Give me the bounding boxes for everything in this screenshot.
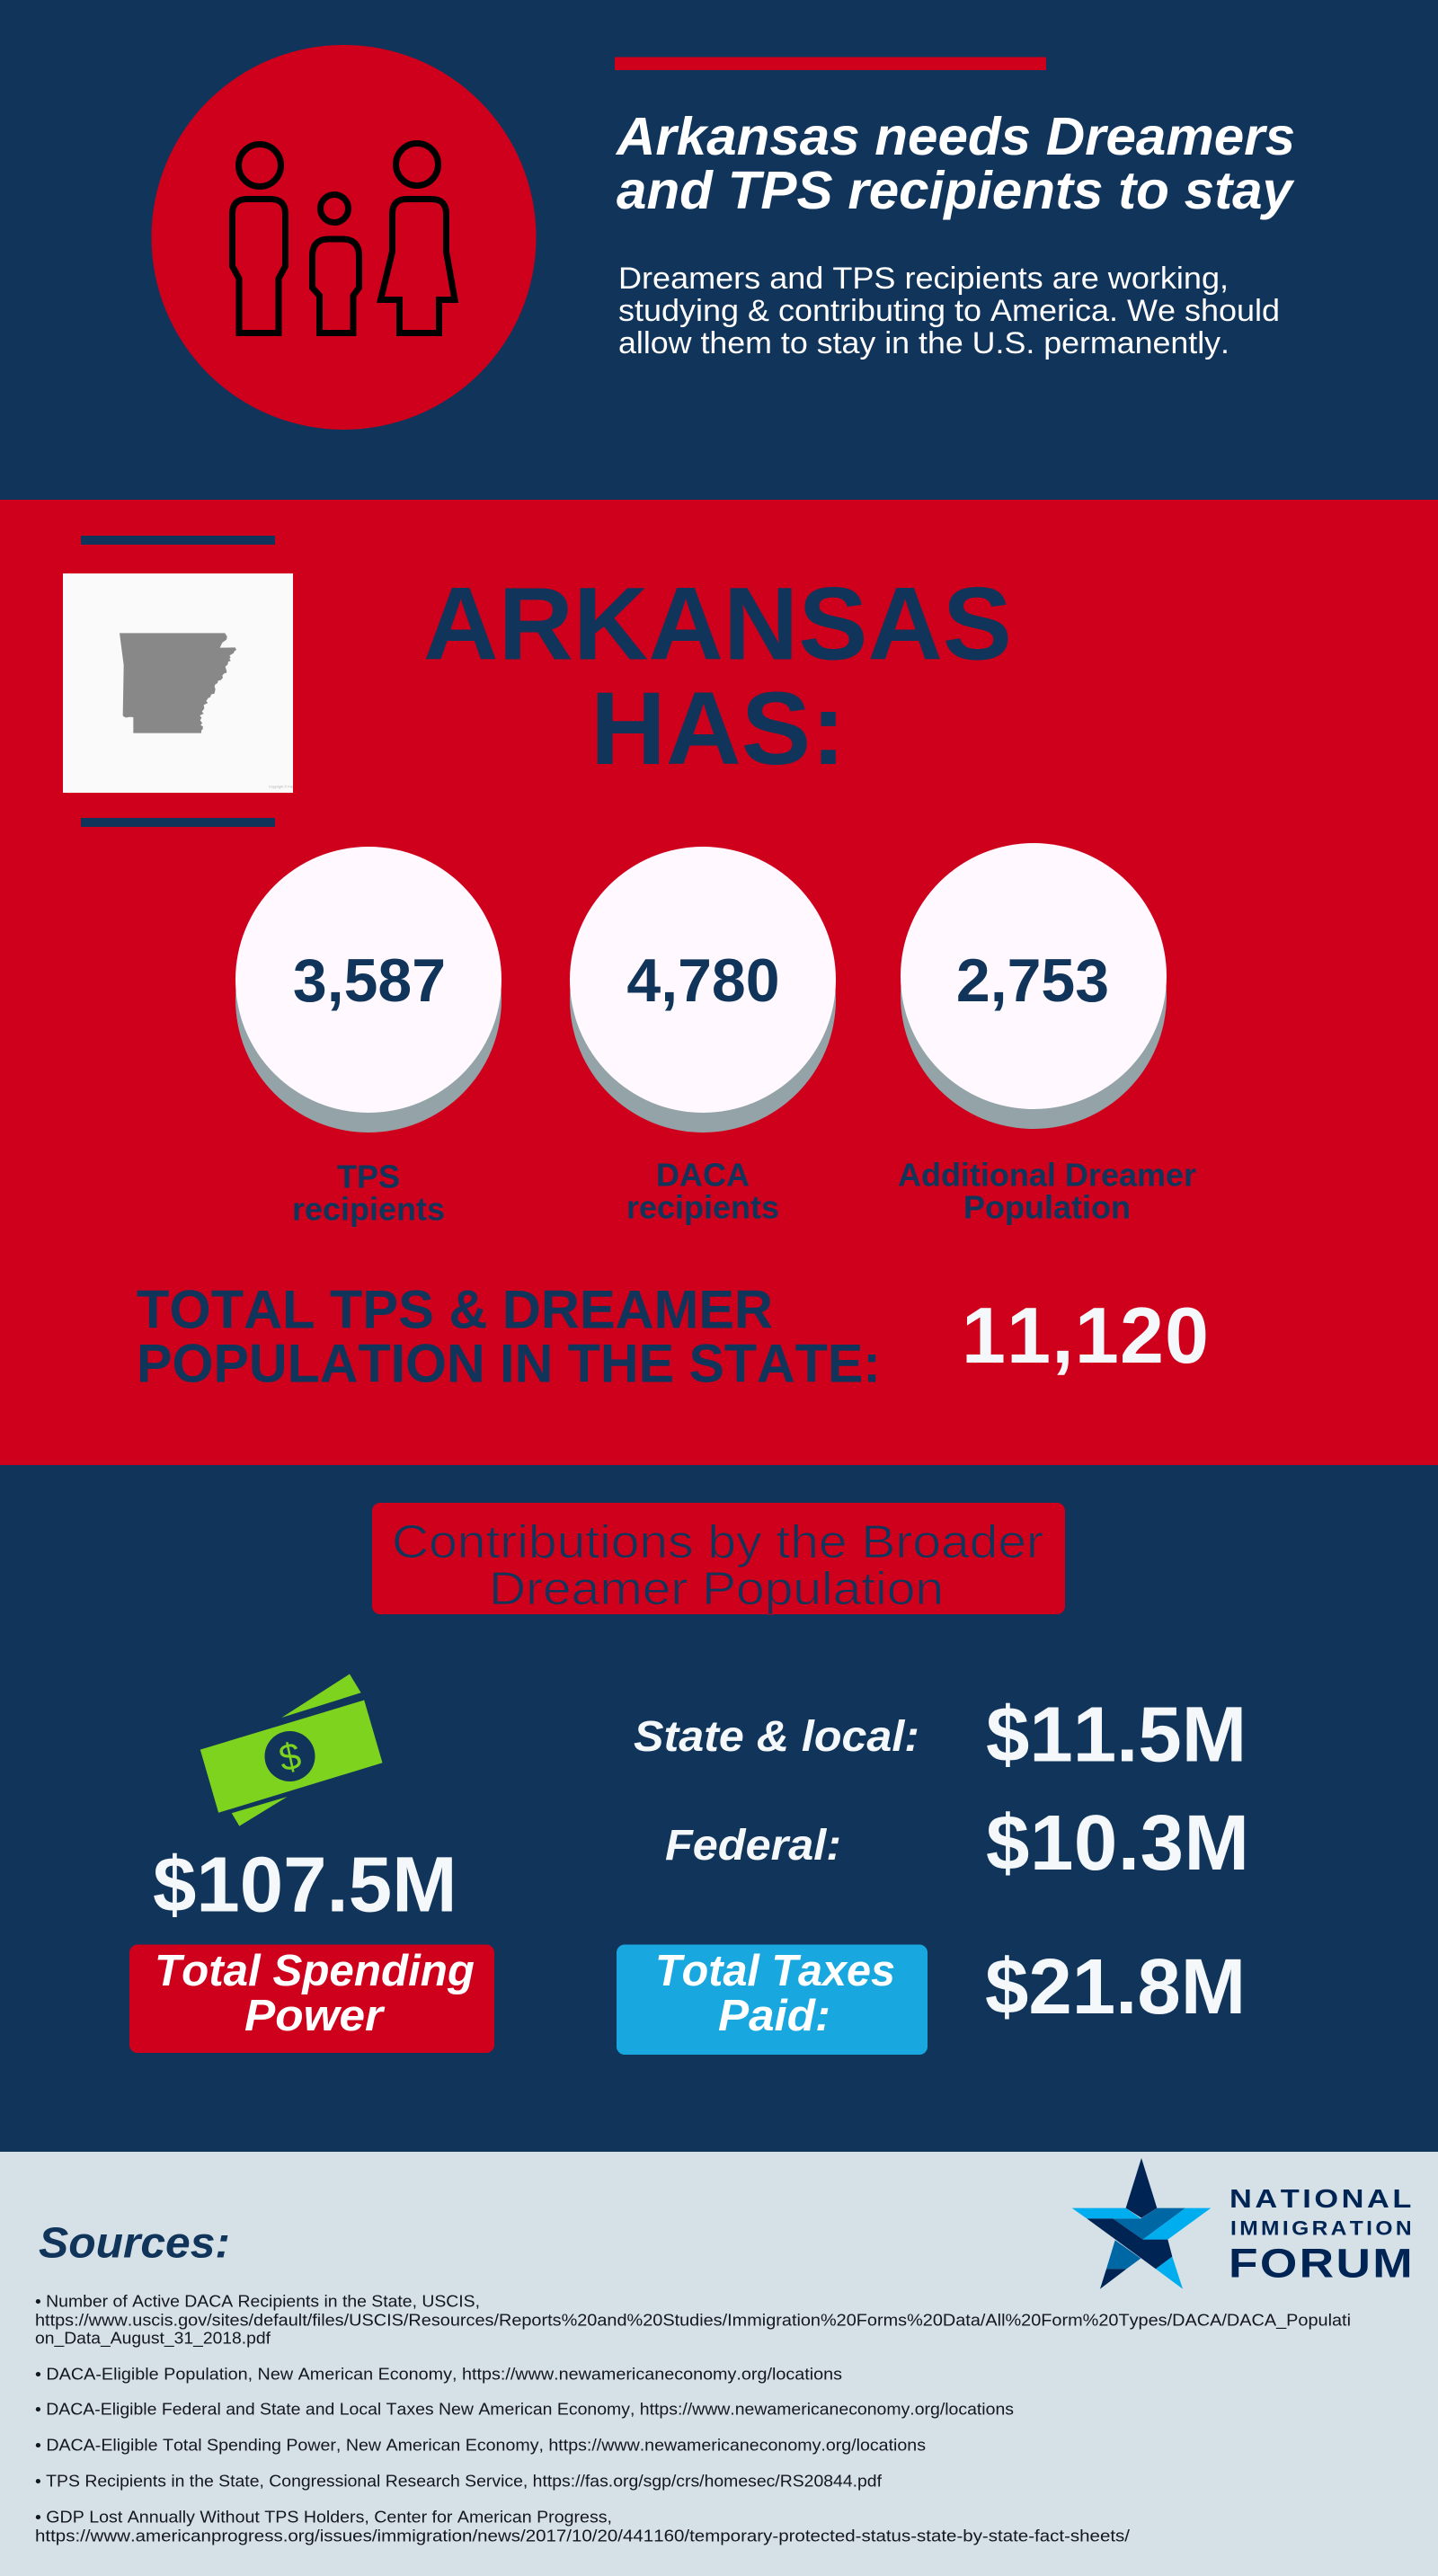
- source list: • Number of Active DACA Recipients in the State, USCIS,: [35, 2292, 480, 2311]
- total label: POPULATION IN THE STATE:: [137, 1334, 881, 1394]
- section heading: [372, 1503, 1065, 1615]
- panel: Arkansas has: [0, 500, 1438, 1465]
- callout: total spending power: Total Spending: [155, 1947, 475, 1995]
- title: [615, 107, 1295, 220]
- label: additional Dreamer population: Additional Dreamer: [898, 1157, 1196, 1194]
- intro text: studying & contributing to America. We should: [618, 294, 1280, 328]
- logo: National Immigration Forum: [1072, 2158, 1415, 2289]
- sources heading: Sources:: [39, 2220, 230, 2268]
- map of Arkansas: Copyright © Fre: [269, 786, 293, 789]
- icon: money bill: $: [275, 1734, 305, 1780]
- stat circle: additional Dreamer population: [901, 843, 1167, 1129]
- intro text: [618, 262, 1280, 360]
- stat circle: TPS recipients: 3,587: [293, 946, 446, 1015]
- label: TPS recipients: [292, 1159, 445, 1227]
- source list: • GDP Lost Annually Without TPS Holders, Center for American Progress,: [35, 2508, 612, 2527]
- stat circle: DACA recipients: 4,780: [626, 946, 780, 1015]
- section heading: Contributions by the Broader: [392, 1516, 1043, 1568]
- panel: header: [0, 0, 1438, 500]
- heading: HAS:: [590, 671, 846, 786]
- icon: family in red circle: [151, 45, 536, 430]
- heading: ARKANSAS: [423, 567, 1012, 682]
- label: additional Dreamer population: Population: [963, 1188, 1131, 1225]
- stat circle: additional Dreamer population: 2,753: [956, 946, 1109, 1015]
- map of Arkansas: [63, 573, 293, 793]
- source list: • TPS Recipients in the State, Congressional Research Service, https://fas.org/sgp/crs/homesec/RS20844.pdf: [35, 2472, 883, 2491]
- source list: https://www.americanprogress.org/issues/immigration/news/2017/10/20/441160/temporary-protected-status-state-by-state-fact-sheets/: [35, 2526, 1131, 2545]
- logo: National Immigration Forum: FORUM: [1229, 2240, 1415, 2286]
- label: DACA recipients: [626, 1157, 779, 1225]
- accent bar: [615, 58, 1046, 70]
- logo: National Immigration Forum: NATIONAL: [1229, 2185, 1415, 2214]
- value: federal: $10.3M: [986, 1799, 1249, 1887]
- section heading: Dreamer Population: [489, 1563, 944, 1615]
- source list: https://www.uscis.gov/sites/default/files/USCIS/Resources/Reports%20and%20Studies/Immigration%20Forms%20Data/All%20Form%20Types/DACA/DACA_Populati: [35, 2310, 1351, 2330]
- icon: money bill: [200, 1674, 383, 1826]
- callout: total spending power: [129, 1945, 494, 2053]
- label: federal: Federal:: [665, 1822, 841, 1870]
- value: total taxes: $21.8M: [985, 1943, 1246, 2030]
- label: state and local: State & local:: [634, 1713, 919, 1761]
- source list: • DACA-Eligible Total Spending Power, New American Economy, https://www.newamericaneconomy.org/locations: [35, 2436, 926, 2455]
- callout: total spending power: Power: [244, 1992, 386, 2040]
- callout: total taxes paid: Paid:: [718, 1992, 830, 2040]
- heading: [423, 567, 1012, 786]
- callout: total taxes paid: [617, 1945, 928, 2055]
- title: Arkansas needs Dreamers: [615, 107, 1295, 166]
- total label: [137, 1280, 881, 1394]
- bottom bar: [81, 818, 275, 827]
- top bar: [81, 536, 275, 545]
- label: TPS recipients: recipients: [292, 1190, 445, 1227]
- intro text: Dreamers and TPS recipients are working,: [618, 262, 1229, 296]
- source list: • DACA-Eligible Federal and State and Local Taxes New American Economy, https://www.newamericaneconomy.org/locations: [35, 2400, 1014, 2419]
- callout: total taxes paid: Total Taxes: [655, 1947, 895, 1995]
- source list: • DACA-Eligible Population, New American Economy, https://www.newamericaneconomy.org/locations: [35, 2365, 842, 2384]
- title: and TPS recipients to stay: [617, 161, 1295, 220]
- intro text: allow them to stay in the U.S. permanently.: [618, 326, 1229, 360]
- value: state and local: $11.5M: [986, 1692, 1247, 1778]
- label: DACA recipients: recipients: [626, 1188, 779, 1225]
- total value: 11,120: [962, 1291, 1209, 1380]
- total label: TOTAL TPS & DREAMER: [137, 1280, 773, 1340]
- spending value: $107.5M: [153, 1841, 457, 1929]
- label: additional Dreamer population: [898, 1157, 1196, 1225]
- panel: sources: [0, 2152, 1438, 2576]
- logo: National Immigration Forum: IMMIGRATION: [1230, 2217, 1415, 2240]
- label: TPS recipients: TPS: [337, 1159, 400, 1195]
- stat circle: TPS recipients: [235, 847, 502, 1133]
- stat circle: DACA recipients: [570, 847, 836, 1133]
- panel: contributions: [0, 1465, 1438, 2152]
- source list: [35, 2292, 1351, 2545]
- label: DACA recipients: DACA: [656, 1157, 750, 1194]
- source list: on_Data_August_31_2018.pdf: [35, 2329, 271, 2349]
